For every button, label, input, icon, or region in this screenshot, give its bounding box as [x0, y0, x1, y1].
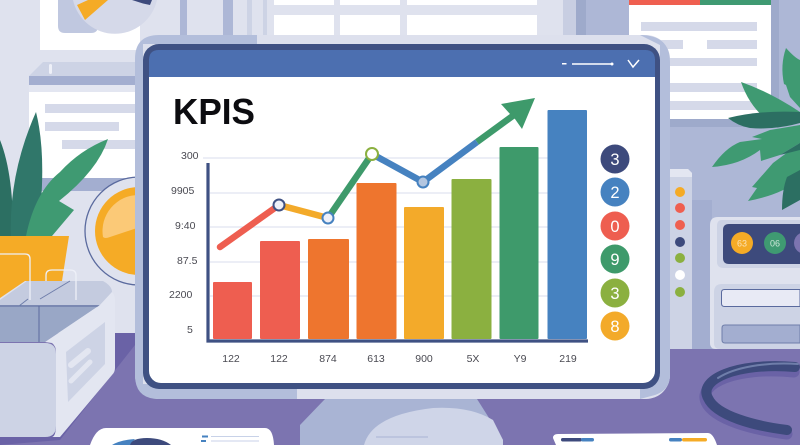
monitor stand [300, 399, 503, 445]
storage box [0, 254, 135, 445]
y axis labels: 9905 [171, 185, 195, 197]
top left pie chart card [40, 0, 157, 50]
monitor bezel [135, 35, 670, 399]
monitor [135, 35, 670, 399]
title: KPIS [173, 91, 255, 132]
x axis labels: 122 [222, 353, 240, 365]
grid lines [203, 158, 550, 296]
orange pot [0, 236, 69, 298]
y axis labels: 9:40 [175, 220, 196, 232]
y axis labels [169, 150, 199, 336]
bottom left card [90, 428, 274, 445]
coin [85, 177, 193, 285]
x axis labels: 900 [415, 353, 433, 365]
background: top centre window wall [180, 0, 586, 36]
legend badges: 3 [610, 285, 620, 303]
control device: 06 [770, 238, 780, 248]
y axis labels: 5 [187, 324, 193, 336]
right document [629, 0, 779, 127]
x axis labels [222, 353, 577, 365]
floor [0, 333, 800, 445]
y axis labels: 2200 [169, 289, 193, 301]
x axis labels: 613 [367, 353, 385, 365]
chart [169, 98, 588, 365]
x axis labels: 874 [319, 353, 337, 365]
legend badges: 8 [610, 318, 620, 336]
x axis labels: 219 [559, 353, 577, 365]
legend badges: 3 [610, 151, 620, 169]
legend badges: 9 [610, 251, 620, 269]
left document [29, 62, 140, 191]
control device: 63 [737, 238, 747, 248]
y axis labels: 300 [181, 150, 199, 162]
x axis labels: 5X [467, 353, 479, 365]
control device [710, 217, 800, 349]
right plant [712, 48, 800, 210]
screen [149, 50, 655, 383]
legend badges: 2 [610, 184, 620, 202]
legend badges [600, 144, 630, 340]
trend line with arrow [220, 98, 535, 247]
axes [208, 163, 588, 341]
cable [705, 364, 798, 434]
y axis labels: 87.5 [177, 255, 198, 267]
x axis labels: Y9 [514, 353, 527, 365]
header bar [149, 50, 655, 77]
bottom right card [553, 433, 717, 445]
x axis labels: 122 [270, 353, 288, 365]
legend badges: 0 [610, 218, 620, 236]
bars [213, 110, 587, 339]
left plant [0, 112, 108, 240]
side tower with status dots [670, 169, 712, 349]
